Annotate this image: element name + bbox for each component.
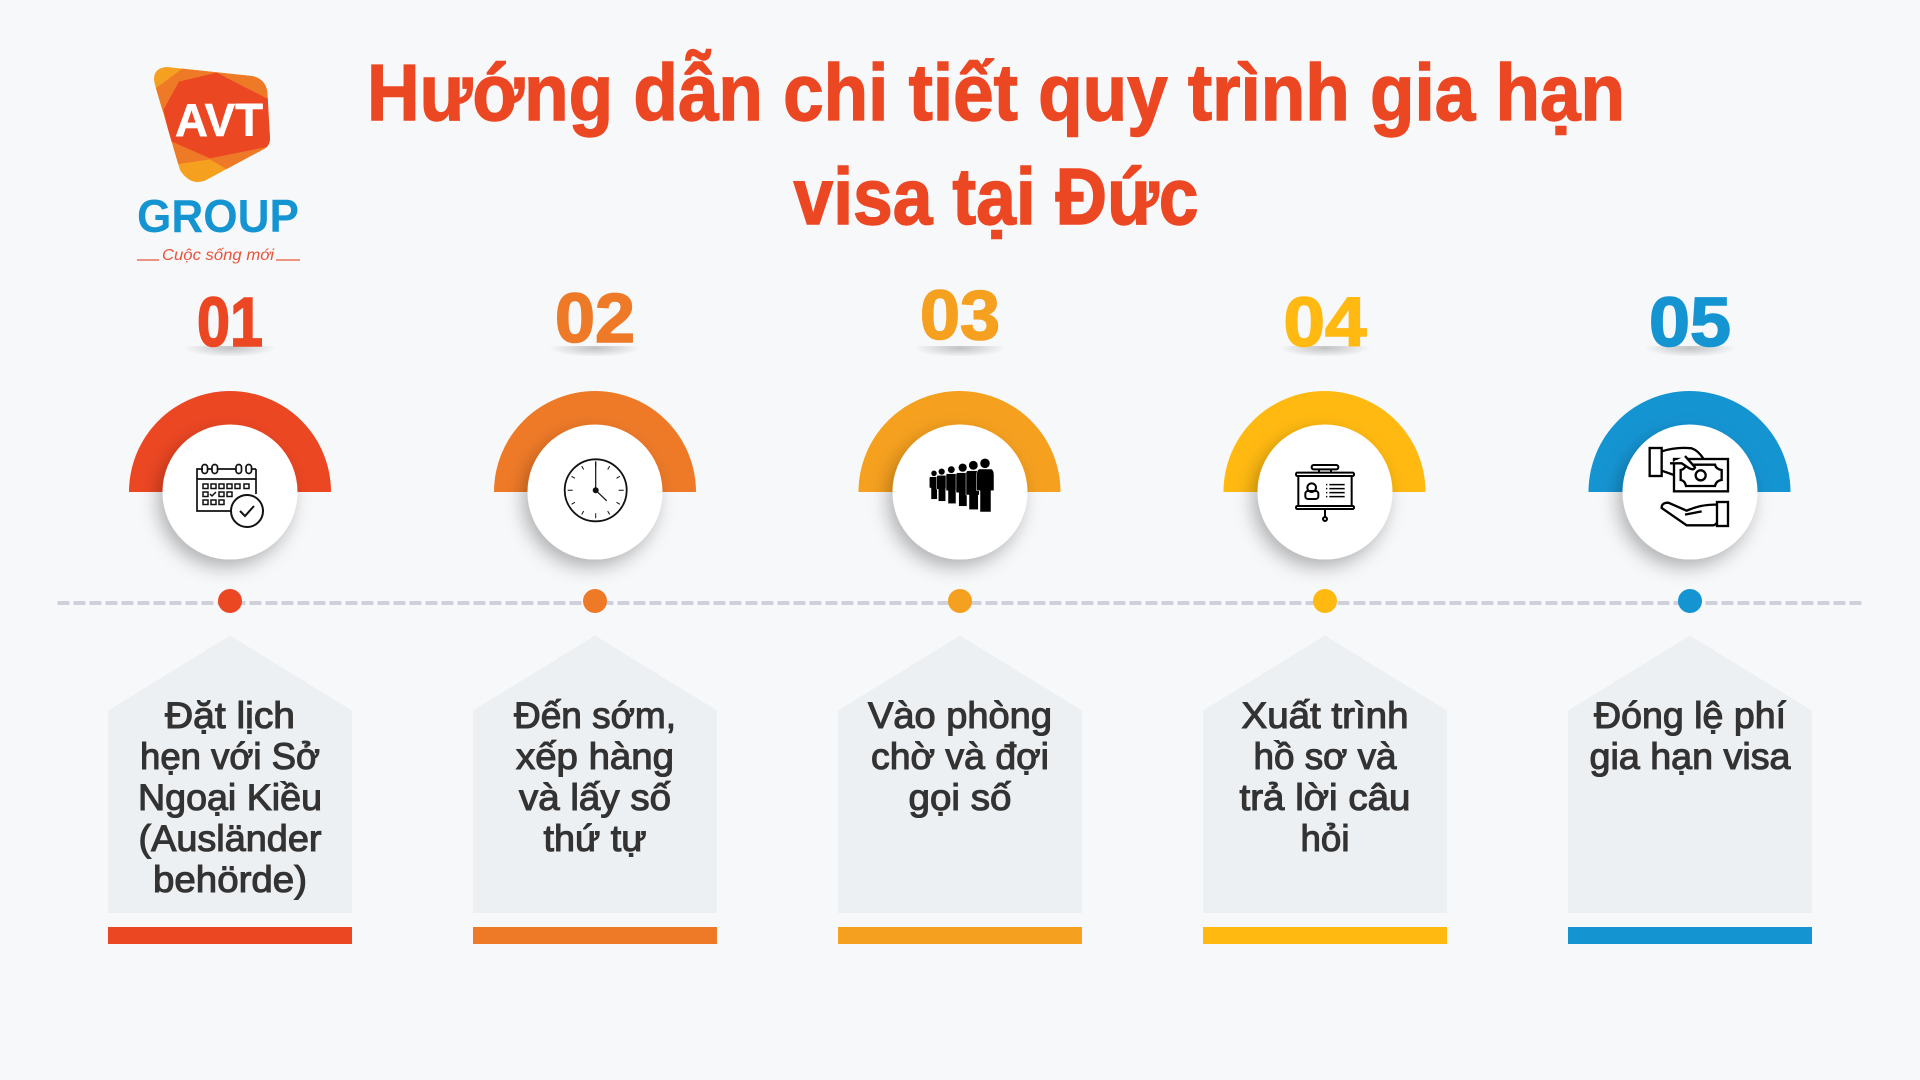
step text: hồ sơ và [1254,736,1397,777]
icon: hand giving money [1650,448,1728,526]
logo mark [154,67,270,182]
number 05: 05 [1649,283,1731,361]
step 1 [108,283,352,944]
logo: AVT Group [137,63,300,264]
step text: gia hạn visa [1590,736,1791,777]
infographic canvas [58,48,1862,944]
step text: Vào phòng [868,695,1052,736]
step text [514,695,676,859]
timeline dot [1313,589,1337,613]
step text: Đến sớm, [514,695,676,736]
icon: clock [565,459,627,521]
white circle [892,424,1028,560]
number 04: 04 [1284,283,1367,361]
step text: xếp hàng [516,736,674,777]
step text: behörde) [153,859,307,900]
timeline dot [1678,589,1702,613]
half ring [1224,391,1426,492]
text card [1203,636,1447,913]
white circle [1622,424,1758,560]
logo text AVT: AVT [175,94,263,146]
icon: calendar [197,464,263,527]
title: Hướng dẫn chi tiết quy trình gia hạn [367,48,1625,137]
text card [473,636,717,913]
timeline dot [218,589,242,613]
step text: gọi số [908,777,1012,818]
number 03: 03 [920,276,1000,354]
half ring [1588,391,1790,492]
white circle [528,424,662,560]
text card [1568,636,1812,913]
step text: hỏi [1300,818,1350,859]
step text: trả lời câu [1240,777,1410,818]
step 2 [473,279,717,944]
timeline dot [583,589,607,613]
logo text GROUP: GROUP [137,190,299,242]
step text: (Ausländer [138,818,322,859]
colour bar [473,927,717,944]
step 4 [1203,283,1447,944]
icon: queue of people [929,458,994,512]
step text [1240,695,1410,859]
title [367,48,1625,241]
step text [868,695,1052,818]
timeline dashed line [58,601,1862,605]
half ring [494,391,696,492]
colour bar [1203,927,1447,944]
step text: Đặt lịch [165,695,295,736]
white circle [1258,424,1392,560]
number 01 [191,296,269,356]
colour bar [838,927,1082,944]
step text: và lấy số [519,777,671,818]
step text [138,695,322,900]
step text: chờ và đợi [871,736,1049,777]
step text: Đóng lệ phí [1594,695,1787,736]
text card [108,636,352,913]
step text: Xuất trình [1242,695,1408,736]
colour bar [108,927,352,944]
logo tagline: Cuộc sống mới [162,247,274,264]
step text [1590,695,1791,777]
colour bar [1568,927,1812,944]
number 02: 02 [555,279,635,357]
text card [838,636,1082,913]
half ring [858,391,1060,492]
step text: hẹn với Sở [140,736,320,777]
timeline dot [948,589,972,613]
icon: presentation board [1296,465,1354,521]
step 5 [1568,283,1812,944]
step 3 [838,276,1082,944]
title: visa tại Đức [794,152,1198,241]
step text: thứ tự [544,818,646,859]
step text: Ngoại Kiều [138,777,322,818]
half ring [129,391,331,492]
white circle [162,424,298,560]
number 01: 01 [197,283,263,361]
